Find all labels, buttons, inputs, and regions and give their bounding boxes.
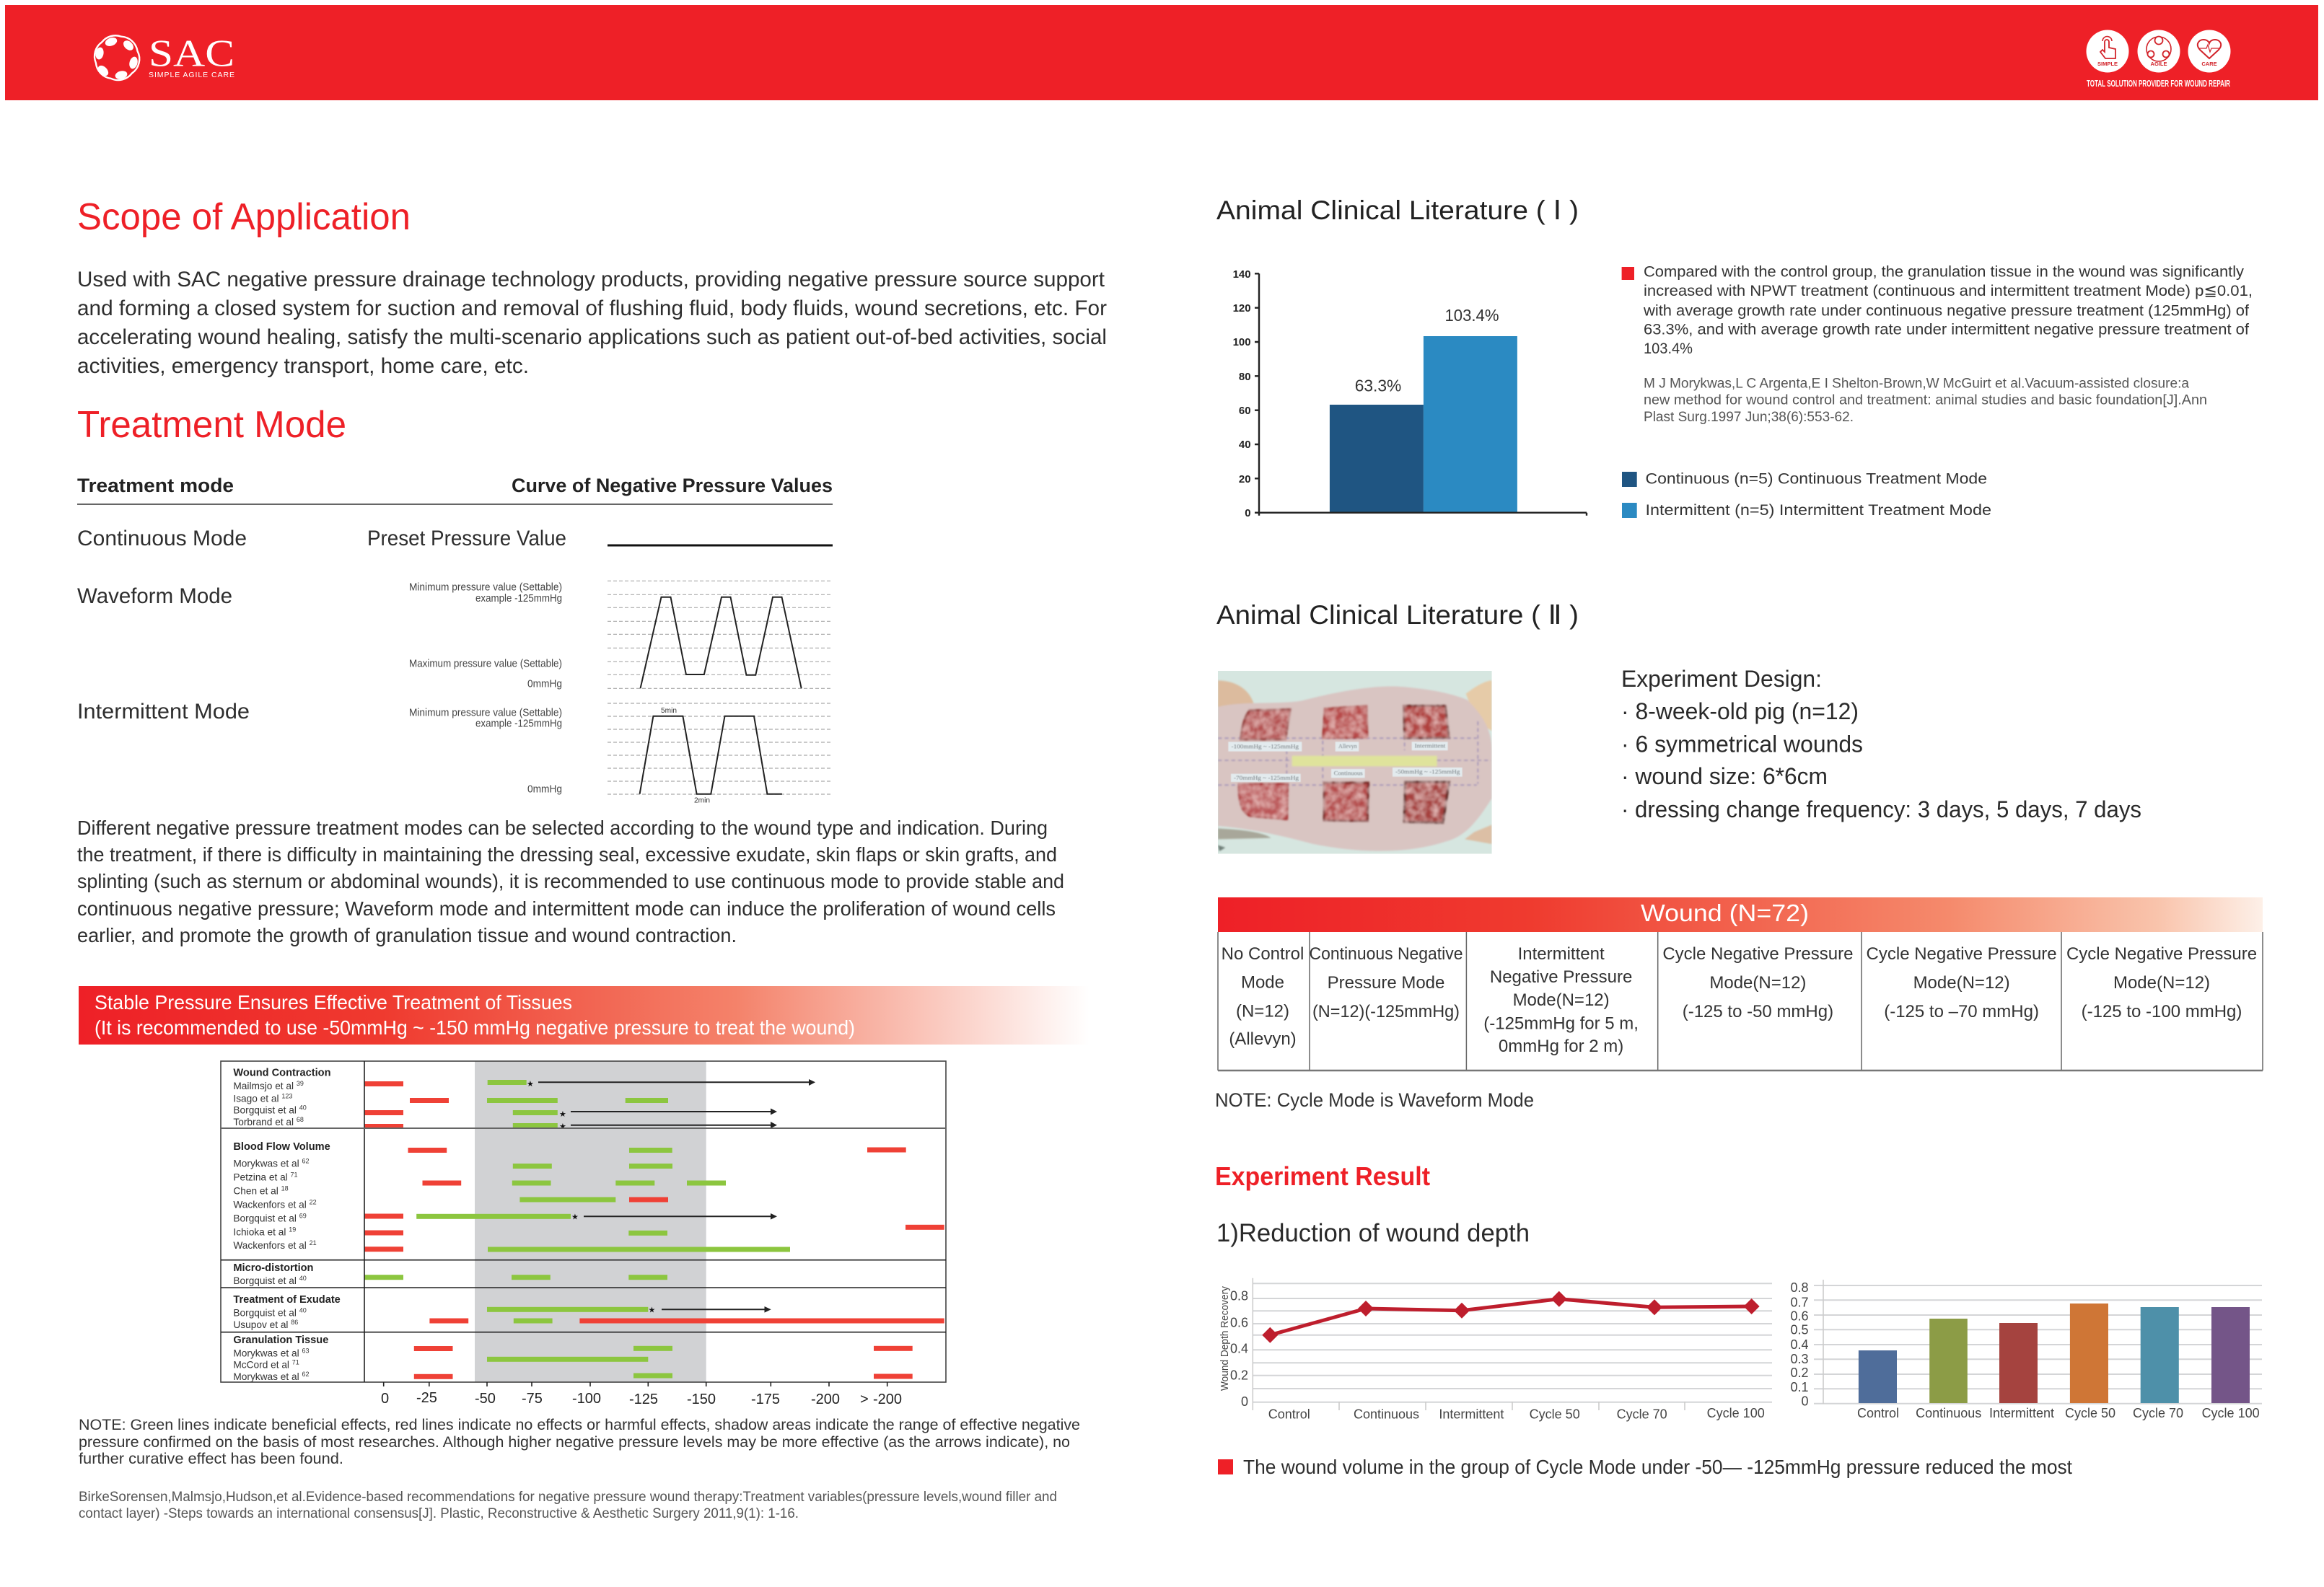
table cell: cycle 50: Cycle Negative Pressure — [1662, 944, 1853, 964]
bar chart: wound volume reduction: Cycle 100 — [2202, 1406, 2260, 1420]
table cell: cycle 70: Mode(N=12) — [1913, 973, 2010, 993]
reference: Morykwas — [1644, 377, 2207, 425]
reference: Morykwas: Plast Surg.1997 Jun;38(6):553-62. — [1644, 410, 1854, 425]
chart: intermittent curve: 5min — [661, 706, 677, 715]
bar chart: granulation growth rate: 80 — [1239, 371, 1251, 383]
text block: treatment mode explanation: the treatment, if there is difficulty in maintaining the dressing seal, excessive exudate, skin flaps or skin grafts, and — [77, 843, 1057, 866]
table: treatment mode curves: Preset Pressure Value — [367, 527, 566, 550]
row labels: studies: 62 — [302, 1371, 309, 1378]
axis labels: mmHg — [381, 1390, 902, 1407]
row labels: studies: 19 — [289, 1226, 296, 1233]
text block: scope description: accelerating wound healing, satisfy the multi-scenario applications such as patient out-of-bed activities, social — [77, 325, 1107, 349]
bar chart: wound volume reduction: 0 — [1801, 1394, 1808, 1408]
line chart: wound depth recovery: Intermittent — [1439, 1407, 1504, 1422]
axis labels: mmHg: -50 — [475, 1391, 496, 1407]
table cell: no control: No Control — [1222, 944, 1304, 964]
bar chart: wound volume reduction: 0.7 — [1790, 1296, 1808, 1310]
bars: treatment of exudate: ★ — [648, 1306, 655, 1314]
row labels: studies: 123 — [281, 1093, 292, 1100]
text block: treatment mode explanation: earlier, and promote the growth of granulation tissue and wound contraction. — [77, 924, 737, 946]
text block: treatment mode explanation: splinting (such as sternum or abdominal wounds), it is recommended to use continuous mode to provide stable and — [77, 870, 1064, 892]
line chart: wound depth recovery: 0.2 — [1230, 1368, 1248, 1382]
icon: care — [2188, 30, 2231, 72]
bars: micro-distortion — [364, 1275, 667, 1280]
bar chart: wound volume reduction: 0.6 — [1790, 1309, 1808, 1324]
reference: Morykwas: new method for wound control and treatment: animal studies and basic foundation[J].Ann — [1644, 393, 2207, 408]
bar chart: granulation growth rate — [1233, 268, 1587, 519]
chart: intermittent curve: 0mmHg — [527, 784, 562, 796]
row labels: studies: 40 — [299, 1306, 307, 1314]
logo: SAC: SIMPLE AGILE CARE — [149, 71, 234, 79]
row labels: studies: Ichioka et al — [233, 1226, 286, 1237]
table cell: cycle 100: Cycle Negative Pressure — [2066, 944, 2257, 964]
row labels: studies: 86 — [291, 1319, 298, 1326]
line chart: wound depth recovery: Continuous — [1354, 1407, 1419, 1422]
callout: literature I findings: 63.3%, and with average growth rate under intermittent negative pressure treatment of — [1644, 320, 2249, 338]
bar chart: granulation growth rate: 120 — [1233, 302, 1251, 315]
heading: animal clinical literature II: Animal Clinical Literature ( Ⅱ ) — [1216, 600, 1579, 630]
chart: waveform curve: 0mmHg — [527, 679, 562, 690]
table: treatment mode curves: Treatment mode — [77, 475, 234, 496]
row labels: studies: 63 — [302, 1347, 309, 1354]
legend: treatment modes — [1622, 470, 1991, 519]
bar chart: wound volume reduction: Intermittent — [1989, 1406, 2054, 1420]
axis labels: mmHg: -200 — [873, 1392, 902, 1407]
text block: treatment mode explanation: continuous negative pressure; Waveform mode and intermittent mode can induce the proliferation of wound cells — [77, 897, 1056, 920]
row labels: studies: Mailmsjo et al — [233, 1081, 294, 1091]
table: treatment mode curves: Intermittent Mode — [77, 700, 250, 724]
row labels: studies: 40 — [299, 1275, 307, 1282]
chart: pressure level evidence — [221, 1061, 946, 1407]
callout: wound volume conclusion: The wound volume in the group of Cycle Mode under -50— -125mmHg pressure reduced the most — [1243, 1456, 2072, 1478]
table cell: no control — [1222, 944, 1304, 1049]
photo: wounds on pig — [1218, 671, 1492, 854]
row labels: studies: Wackenfors et al — [233, 1240, 307, 1251]
text block: experiment design: · dressing change frequency: 3 days, 5 days, 7 days — [1621, 796, 2141, 822]
bar chart: wound volume reduction: Cycle 70 — [2133, 1406, 2183, 1420]
gradient banner: stable pressure — [79, 986, 1089, 1045]
row labels: studies: 39 — [297, 1080, 304, 1087]
table cell: no control: (N=12) — [1236, 1001, 1289, 1021]
icon: simple — [2087, 30, 2128, 72]
heading: experiment result: Experiment Result — [1215, 1161, 1430, 1191]
table: wound groups — [1218, 897, 2263, 1071]
heading: treatment mode: Treatment Mode — [77, 404, 346, 446]
row labels: studies: 62 — [302, 1157, 309, 1164]
row labels: studies: Granulation Tissue — [233, 1335, 328, 1346]
chart: waveform curve: Maximum pressure value (Settable) — [409, 659, 562, 670]
bars: wound contraction — [364, 1079, 815, 1131]
row labels: studies: Wound Contraction — [233, 1068, 331, 1079]
legend: treatment modes: Continuous (n=5) Continuous Treatment Mode — [1645, 470, 1987, 488]
line chart: wound depth recovery: Cycle 50 — [1530, 1407, 1580, 1422]
row labels: studies: Borgquist et al — [233, 1213, 297, 1223]
photo: wounds on pig: Intermittent — [1415, 743, 1446, 749]
chart: intermittent curve: 2min — [694, 796, 710, 805]
text block: experiment design — [1621, 666, 2141, 822]
table cell: intermittent: Negative Pressure — [1490, 967, 1632, 987]
row labels: studies: Treatment of Exudate — [233, 1294, 341, 1306]
text block: experiment design: · 6 symmetrical wounds — [1621, 731, 1863, 757]
table: treatment mode curves: Continuous Mode — [77, 527, 247, 550]
line chart: wound depth recovery: 0.8 — [1230, 1289, 1248, 1304]
bar chart: granulation growth rate: 63.3% — [1355, 377, 1401, 395]
row labels: studies: Borgquist et al — [233, 1275, 297, 1286]
logo: SAC: SAC — [149, 33, 234, 75]
bar chart: granulation growth rate: 103.4% — [1444, 306, 1499, 325]
line chart: wound depth recovery: Control — [1268, 1407, 1310, 1422]
table cell: continuous — [1309, 944, 1463, 1021]
table cell: cycle 50: Mode(N=12) — [1709, 973, 1806, 993]
table: wound groups: Wound (N=72) — [1641, 900, 1809, 926]
note: chart explanation — [79, 1416, 1080, 1467]
reference: evidence-based recommendations — [79, 1490, 1057, 1521]
row labels: studies: Usupov et al — [233, 1319, 288, 1330]
photo: wounds on pig: Allevyn — [1338, 743, 1357, 749]
gradient banner: stable pressure: (It is recommended to use -50mmHg ~ -150 mmHg negative pressure to treat the wound) — [95, 1016, 855, 1039]
bar chart: granulation growth rate: 0 — [1245, 507, 1251, 519]
bars: granulation tissue — [414, 1346, 913, 1379]
line chart: wound depth recovery: Cycle 100 — [1707, 1406, 1765, 1420]
chart: intermittent curve: example -125mmHg — [475, 718, 562, 730]
bar chart: wound volume reduction: 0.1 — [1790, 1380, 1808, 1394]
bar chart: wound volume reduction: 0.3 — [1790, 1352, 1808, 1366]
axis labels: mmHg: -200 — [811, 1392, 840, 1407]
table cell: continuous: (N=12)(-125mmHg) — [1312, 1002, 1460, 1021]
axis labels: mmHg: -125 — [629, 1392, 658, 1407]
heading: animal clinical literature I: Animal Clinical Literature ( Ⅰ ) — [1216, 195, 1579, 225]
line chart: wound depth recovery: 0 — [1241, 1394, 1248, 1409]
row labels: studies: Torbrand et al — [233, 1117, 294, 1127]
table cell: cycle 100: (-125 to -100 mmHg) — [2082, 1002, 2242, 1021]
text block: scope description: activities, emergency transport, home care, etc. — [77, 354, 529, 378]
bars: wound contraction: ★ — [527, 1079, 534, 1089]
table cell: intermittent: Intermittent — [1518, 944, 1605, 964]
bars: blood flow volume — [364, 1147, 944, 1252]
row labels: studies: Petzina et al — [233, 1171, 288, 1182]
bar chart: wound volume reduction: 0.8 — [1790, 1280, 1808, 1295]
table cell: intermittent — [1483, 944, 1639, 1056]
table cell: continuous: Pressure Mode — [1328, 973, 1444, 993]
logo: SAC — [95, 33, 234, 80]
bars: treatment of exudate — [429, 1306, 944, 1323]
icon: care: CARE — [2201, 61, 2217, 67]
row labels: studies: Micro-distortion — [233, 1262, 314, 1274]
chart: intermittent curve — [409, 703, 832, 805]
row labels: studies: 21 — [310, 1239, 317, 1247]
row labels: studies: 69 — [299, 1212, 307, 1219]
line chart: wound depth recovery — [1219, 1278, 1772, 1422]
callout: literature I findings — [1622, 263, 2253, 357]
text block: experiment design: · 8-week-old pig (n=12) — [1621, 698, 1859, 724]
text block: treatment mode explanation: Different negative pressure treatment modes can be selected according to the wound type and indication. During — [77, 817, 1048, 839]
axis labels: mmHg: > — [860, 1392, 869, 1407]
table cell: cycle 50 — [1662, 944, 1853, 1021]
bar chart: wound volume reduction: 0.5 — [1790, 1322, 1808, 1337]
photo: wounds on pig: Continuous — [1334, 770, 1363, 776]
row labels: studies: 68 — [297, 1116, 304, 1123]
photo: wounds on pig: -50mmHg ~ -125mmHg — [1395, 768, 1460, 775]
row labels: studies: Borgquist et al — [233, 1307, 297, 1318]
table cell: intermittent: (-125mmHg for 5 m, — [1483, 1014, 1639, 1034]
bar chart: wound volume reduction: 0.2 — [1790, 1366, 1808, 1380]
callout: literature I findings: increased with NPWT treatment (continuous and intermittent treatment Mode) p≦0.01, — [1644, 282, 2253, 299]
row labels: studies: 71 — [292, 1358, 299, 1366]
axis labels: mmHg: 0 — [381, 1391, 389, 1407]
row labels: studies: Morykwas et al — [233, 1348, 299, 1358]
callout: literature I findings: 103.4% — [1644, 340, 1693, 357]
row labels: studies: 71 — [291, 1171, 298, 1178]
table cell: intermittent: 0mmHg for 2 m) — [1499, 1037, 1623, 1056]
subheading: reduction of wound depth: 1)Reduction of wound depth — [1216, 1219, 1530, 1247]
row labels: studies: 40 — [299, 1104, 307, 1111]
icon: agile — [2137, 30, 2180, 72]
table cell: cycle 50: (-125 to -50 mmHg) — [1683, 1002, 1833, 1021]
text block: scope description — [77, 268, 1107, 378]
reference: evidence-based recommendations: BirkeSorensen,Malmsjo,Hudson,et al.Evidence-based recommendations for negative pressure wound therapy:Treatment variables(pressure levels,wound filler and — [79, 1490, 1057, 1505]
line chart: wound depth recovery: 0.4 — [1230, 1342, 1248, 1356]
header banner — [5, 5, 2318, 100]
bar chart: granulation growth rate: 140 — [1233, 268, 1251, 281]
icon: simple: SIMPLE — [2097, 61, 2118, 67]
icon: agile: AGILE — [2151, 61, 2167, 67]
bar chart: granulation growth rate: 60 — [1239, 405, 1251, 417]
table: treatment mode curves — [77, 475, 833, 805]
note: chart explanation: pressure confirmed on the basis of most researches. Although higher negative pressure levels may be more effective (as the arrows indicate), no — [79, 1433, 1070, 1451]
chart: waveform curve: example -125mmHg — [475, 593, 562, 605]
bar chart: wound volume reduction — [1790, 1280, 2262, 1420]
table cell: no control: (Allevyn) — [1229, 1029, 1297, 1049]
photo: wounds on pig: -100mmHg ~ -125mmHg — [1232, 744, 1299, 750]
axis labels: mmHg: -100 — [572, 1391, 601, 1407]
row labels: studies: Wackenfors et al — [233, 1199, 307, 1210]
chart: intermittent curve: Minimum pressure value (Settable) — [409, 708, 562, 719]
heading: scope of application: Scope of Application — [77, 196, 411, 238]
axis labels: mmHg: -75 — [522, 1391, 543, 1407]
bar chart: wound volume reduction: Continuous — [1916, 1406, 1981, 1420]
table cell: cycle 100 — [2066, 944, 2257, 1021]
axis labels: mmHg: -175 — [751, 1392, 780, 1407]
table: treatment mode curves: Curve of Negative Pressure Values — [512, 475, 833, 496]
row labels: studies: Isago et al — [233, 1094, 279, 1104]
chart: waveform curve — [409, 581, 833, 690]
row labels: studies: Blood Flow Volume — [233, 1141, 330, 1153]
table cell: no control: Mode — [1241, 972, 1284, 992]
bars: blood flow volume: ★ — [571, 1212, 579, 1222]
reference: Morykwas: M J Morykwas,L C Argenta,E I Shelton-Brown,W McGuirt et al.Vacuum-assisted closure:a — [1644, 377, 2189, 392]
bar chart: wound volume reduction: 0.4 — [1790, 1337, 1808, 1352]
callout: literature I findings: Compared with the control group, the granulation tissue in the wound was significantly — [1644, 263, 2244, 280]
tagline: TOTAL SOLUTION PROVIDER FOR WOUND REPAIR — [2087, 79, 2230, 89]
axis labels: mmHg: -150 — [687, 1392, 716, 1407]
line chart: wound depth recovery: Wound Depth Recovery — [1219, 1286, 1231, 1391]
bar chart: granulation growth rate: 20 — [1239, 473, 1251, 485]
bar chart: wound volume reduction: Control — [1857, 1406, 1899, 1420]
text block: scope description: Used with SAC negative pressure drainage technology products, providing negative pressure source support — [77, 268, 1105, 291]
row labels: studies: McCord et al — [233, 1359, 289, 1370]
row labels: studies: Chen et al — [233, 1185, 279, 1196]
row labels: studies: Morykwas et al — [233, 1158, 299, 1169]
chart: waveform curve: Minimum pressure value (Settable) — [409, 582, 562, 594]
table cell: cycle 70: (-125 to –70 mmHg) — [1884, 1002, 2039, 1021]
text block: experiment design: Experiment Design: — [1621, 666, 1822, 692]
table cell: cycle 100: Mode(N=12) — [2113, 973, 2210, 993]
callout: literature I findings: with average growth rate under continuous negative pressure treatment (125mmHg) of — [1643, 302, 2249, 319]
line chart: wound depth recovery: Cycle 70 — [1617, 1407, 1667, 1422]
row labels: studies — [233, 1068, 341, 1382]
row labels: studies: Morykwas et al — [233, 1371, 299, 1382]
table: treatment mode curves: Waveform Mode — [77, 584, 232, 608]
bar chart: wound volume reduction: Cycle 50 — [2065, 1406, 2115, 1420]
bar chart: granulation growth rate: 40 — [1239, 439, 1251, 451]
line chart: wound depth recovery: 0.6 — [1230, 1315, 1248, 1329]
table cell: intermittent: Mode(N=12) — [1513, 990, 1610, 1010]
text block: scope description: and forming a closed system for suction and removal of flushing fluid, body fluids, wound secretions, etc. For — [77, 296, 1107, 320]
bars: wound contraction: ★ — [559, 1122, 566, 1131]
bar chart: granulation growth rate: 100 — [1233, 336, 1251, 348]
gradient banner: stable pressure: Stable Pressure Ensures Effective Treatment of Tissues — [95, 991, 572, 1014]
axis labels: mmHg: -25 — [416, 1390, 437, 1406]
row labels: studies: Borgquist et al — [233, 1104, 297, 1115]
bars: wound contraction: ★ — [559, 1109, 566, 1119]
note: chart explanation: NOTE: Green lines indicate beneficial effects, red lines indicate no effects or harmful effects, shadow areas indicate the range of effective negative — [79, 1416, 1080, 1433]
row labels: studies: 22 — [310, 1198, 317, 1205]
photo: wounds on pig: -70mmHg ~ -125mmHg — [1234, 775, 1299, 781]
note: chart explanation: further curative effect has been found. — [79, 1450, 343, 1467]
text block: treatment mode explanation — [77, 817, 1064, 946]
row labels: studies: 18 — [281, 1184, 289, 1192]
reference: evidence-based recommendations: contact layer) -Steps towards an international consensus[J]. Plastic, Reconstructive & Aesthetic Surgery 2011,9(1): 1-16. — [79, 1506, 799, 1521]
table cell: continuous: Continuous Negative — [1309, 944, 1463, 964]
text block: experiment design: · wound size: 6*6cm — [1621, 763, 1828, 789]
table cell: cycle 70 — [1867, 944, 2057, 1021]
note: cycle mode: NOTE: Cycle Mode is Waveform Mode — [1215, 1089, 1534, 1111]
legend: treatment modes: Intermittent (n=5) Intermittent Treatment Mode — [1645, 501, 1991, 519]
table cell: cycle 70: Cycle Negative Pressure — [1867, 944, 2057, 964]
